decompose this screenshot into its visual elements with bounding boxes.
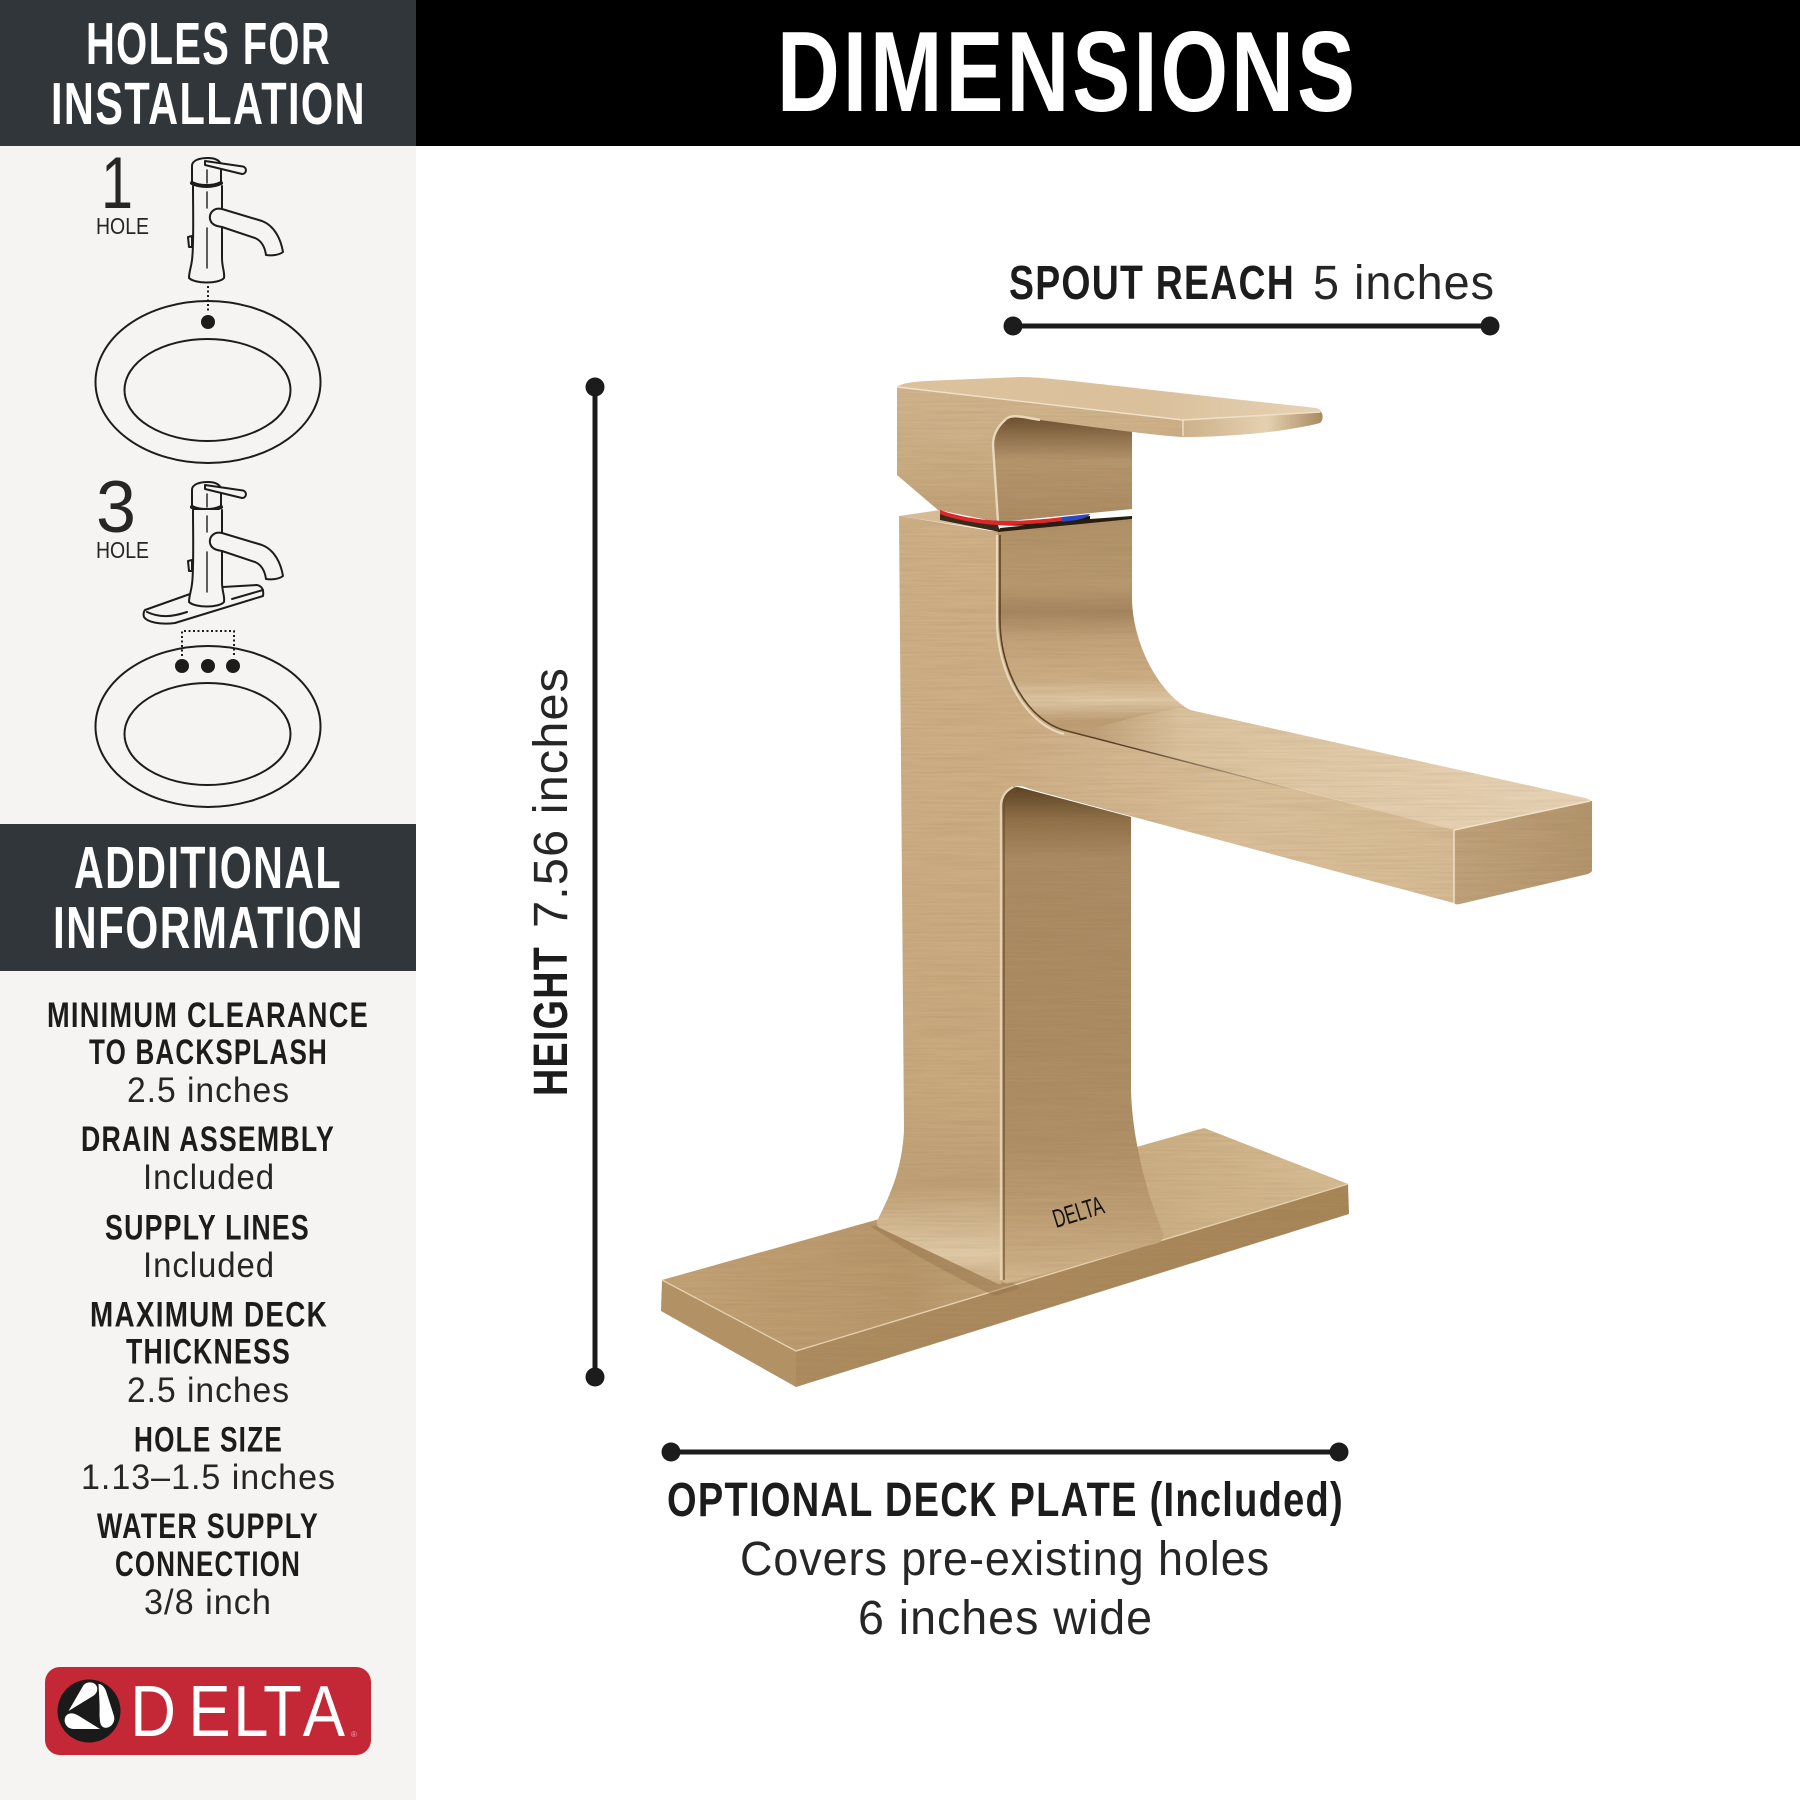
title banner: dimensions [416,0,1800,146]
logo: delta: ® [351,1730,357,1739]
heading: additional information [0,824,416,971]
label: 1 hole: HOLE [96,213,149,239]
item: drain assembly: Included [143,1158,275,1197]
item: maximum deck thickness: MAXIMUM DECK [90,1296,328,1334]
item: minimum clearance: MINIMUM CLEARANCE [47,996,369,1035]
item: minimum clearance: 2.5 inches [127,1071,290,1110]
heading: holes for installation: INSTALLATION [51,71,366,137]
faucet body top face [899,510,998,531]
item: supply lines: Included [143,1246,275,1285]
diagram: one hole installation [96,143,320,463]
diagram: three hole installation [96,467,320,807]
item: drain assembly: DRAIN ASSEMBLY [81,1120,335,1159]
dimension: spout reach [1004,257,1500,336]
label: 1 hole: 1 [101,143,133,224]
label: 3 hole: 3 [96,467,136,548]
dimension: spout reach: SPOUT REACH [1009,257,1295,310]
spout side highlight [1014,720,1454,903]
arch highlight rim [1001,787,1013,1280]
heading: additional information: ADDITIONAL [74,835,342,901]
dimension: height [525,378,604,1386]
item: hole size: HOLE SIZE [134,1420,283,1460]
item: water supply connection [97,1507,319,1622]
dimension: optional deck plate [662,1442,1348,1645]
temperature ring [940,510,1132,532]
icon: three hole sink [96,646,320,807]
heading: holes for installation [0,0,416,146]
handle top surface [897,377,1322,426]
text block: additional information list [47,996,369,1622]
handle inner block [985,412,1132,522]
logo: delta [45,1667,371,1755]
handle top edge highlight [897,387,1320,436]
icon: single hole sink [96,301,320,463]
label: 1 hole [96,143,149,239]
spout end corner highlight [1454,801,1590,903]
handle left face [897,387,1183,522]
label: 3 hole [96,467,149,563]
dimension: optional deck plate: Covers pre-existing holes [740,1533,1270,1586]
icon: single hole faucet [188,158,283,312]
spout end face [1454,801,1592,904]
neck and spout crease line [1000,535,1300,791]
dimension: height: HEIGHT [525,946,578,1096]
handle inner rim highlight [993,416,1040,522]
icon: faucet with deck plate [144,482,283,656]
brand mark on faucet base: DELTA [1049,1190,1108,1234]
panel: left sidebar [0,0,416,1800]
item: hole size: 1.13–1.5 inches [81,1458,336,1497]
icon: delta emblem [58,1680,120,1742]
title banner: dimensions: DIMENSIONS [777,9,1358,136]
spout top surface [1067,708,1592,830]
item: maximum deck thickness: 2.5 inches [127,1371,290,1410]
item: minimum clearance [47,996,369,1110]
item: maximum deck thickness: THICKNESS [126,1332,291,1372]
faucet body and spout side face [877,516,1454,1284]
logo: delta: DELTA [130,1672,346,1752]
deck plate [661,1128,1349,1387]
product: faucet with deck plate [661,377,1592,1387]
item: supply lines: SUPPLY LINES [105,1208,310,1248]
item: hole size [81,1420,336,1497]
item: water supply connection: CONNECTION [115,1545,301,1584]
dimension: optional deck plate: 6 inches wide [858,1592,1153,1645]
item: maximum deck thickness [90,1296,328,1410]
neck highlight rim [997,535,1064,734]
faucet neck face [985,519,1270,745]
item: supply lines [105,1208,310,1285]
item: water supply connection: 3/8 inch [144,1583,272,1622]
heading: holes for installation: HOLES FOR [86,11,331,77]
dimension: height: 7.56 inches [525,667,578,928]
heading: additional information: INFORMATION [53,895,364,961]
handle lever tip [1183,412,1323,437]
dimension: optional deck plate: OPTIONAL DECK PLATE (Included) [667,1474,1344,1527]
item: water supply connection: WATER SUPPLY [97,1507,319,1546]
label: 3 hole: HOLE [96,537,149,563]
dimension: spout reach: 5 inches [1313,257,1495,310]
arch dark line [1004,790,1016,1280]
faucet lower right face [1002,787,1163,1283]
item: drain assembly [81,1120,335,1197]
item: minimum clearance: TO BACKSPLASH [89,1033,328,1072]
